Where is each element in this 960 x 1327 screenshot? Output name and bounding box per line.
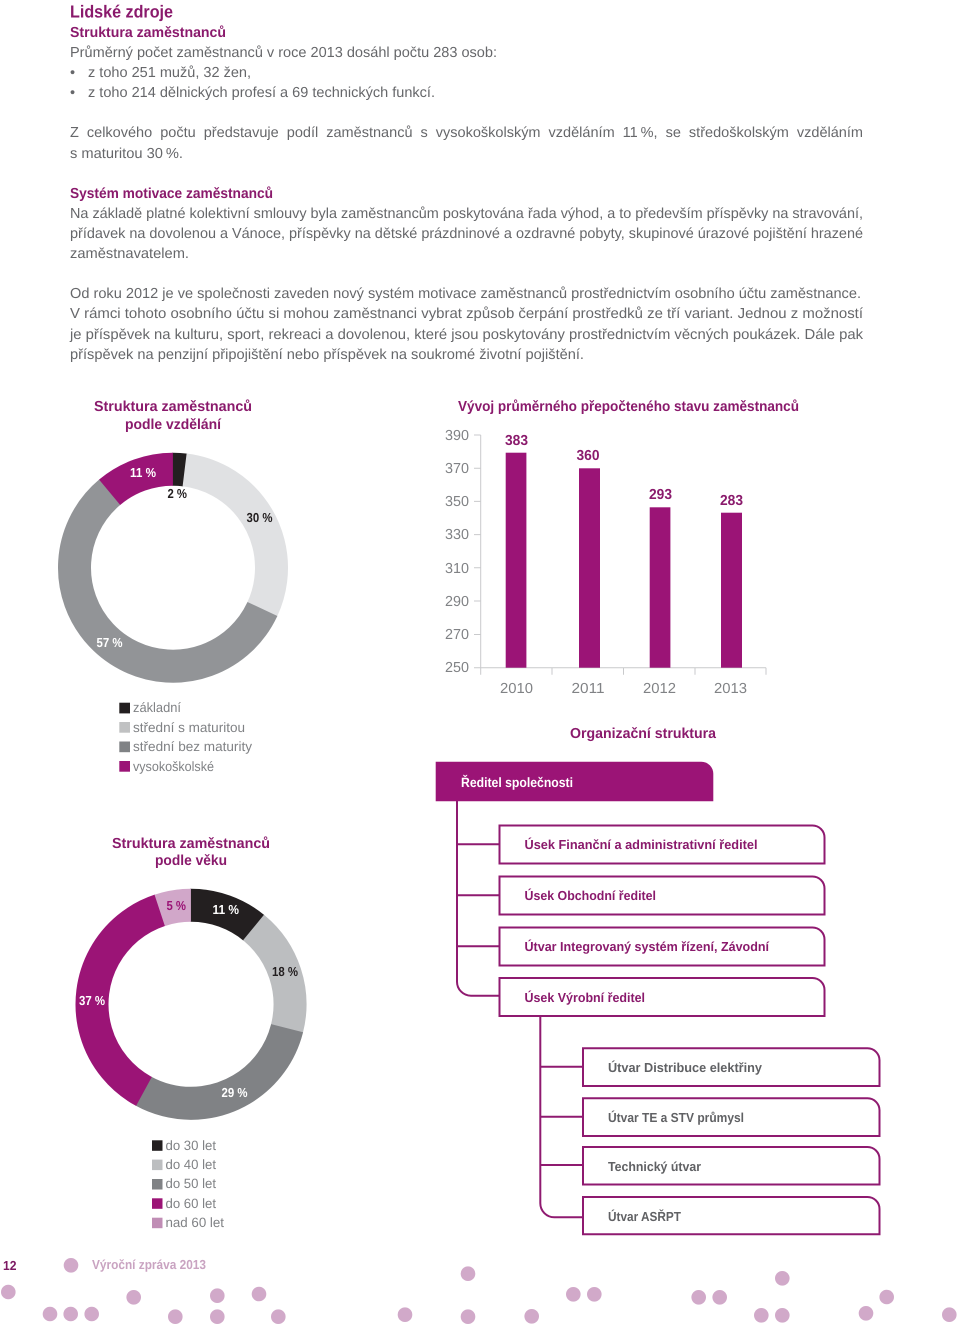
box: integrated management [500, 928, 824, 966]
legend: education: střední bez maturity [133, 739, 252, 754]
text block: motivation system: zaměstnavatelem. [70, 246, 189, 262]
donut chart: age: 11 % [212, 902, 239, 917]
heading: headcount chart: Vývoj průměrného přepočteného stavu zaměstnanců [458, 399, 799, 415]
bar chart: headcount: 2013 [714, 681, 747, 697]
box: TE and STV: Útvar TE a STV průmysl [608, 1110, 744, 1125]
heading: organisational structure: Organizační struktura [570, 726, 717, 742]
bar chart: headcount: 360 [576, 448, 600, 464]
box: sales director: Úsek Obchodní ředitel [524, 888, 656, 903]
donut chart: education: 2 % [168, 486, 187, 501]
legend: age [152, 1138, 224, 1230]
box: technical department: Technický útvar [608, 1159, 701, 1174]
legend: education: vysokoškolské [133, 759, 214, 774]
heading: age chart: Struktura zaměstnanců [112, 836, 270, 852]
donut chart: education [34, 429, 312, 706]
heading: age chart [112, 836, 270, 869]
text block: employee structure: • [70, 85, 75, 101]
box: finance director: Úsek Finanční a administrativní ředitel [524, 837, 758, 852]
bar chart: headcount: 290 [445, 594, 469, 610]
box: production director: Úsek Výrobní ředitel [524, 990, 645, 1005]
bar chart: headcount: 370 [445, 461, 469, 477]
text block: employee structure: s maturitou 30 %. [70, 146, 183, 162]
donut chart: education: 11 % [130, 465, 156, 480]
bar chart: headcount: 293 [649, 487, 672, 503]
report name: Výroční zpráva 2013 [92, 1257, 206, 1272]
box: TE and STV [583, 1098, 880, 1136]
panel: organisational structure [436, 726, 880, 1234]
box: ASRPT: Útvar ASŘPT [608, 1209, 681, 1224]
box: production director [500, 978, 824, 1016]
text block: employee structure: z toho 214 dělnických profesí a 69 technických funkcí. [88, 85, 435, 101]
text block: motivation system: Na základě platné kolektivní smlouvy byla zaměstnancům poskytována řada výhod, a to především příspěvky na stravování, [70, 206, 863, 222]
legend: education: střední s maturitou [133, 720, 245, 735]
dot pattern [1, 1258, 957, 1324]
box: finance director [500, 826, 824, 864]
text block: employee structure: Z celkového počtu představuje podíl zaměstnanců s vysokoškolským vzděláním 11 %, se středoškolským vzděláním [70, 125, 863, 141]
donut chart: age: 18 % [272, 964, 298, 979]
text block: employee structure [70, 25, 863, 162]
box: sales director [500, 876, 824, 914]
text block: motivation system: přídavek na dovolenou a Vánoce, příspěvky na dětské prázdninové a ozdravné pobyty, skupinové úrazové pojištění hrazené [70, 226, 863, 242]
bar chart: headcount [445, 428, 766, 697]
bar chart: headcount: 250 [445, 660, 469, 676]
bar chart: headcount: 330 [445, 527, 469, 543]
panel: education structure [34, 399, 312, 774]
bar chart: headcount: 283 [720, 493, 743, 509]
legend: education: základní [133, 700, 181, 715]
text block: motivation system: V rámci tohoto osobního účtu si mohou zaměstnanci vybrat způsob čerpání prostředků ze tří variant. Jednou z možností [70, 306, 863, 322]
connector lines: first level [457, 801, 500, 996]
box: electricity distribution: Útvar Distribuce elektřiny [608, 1060, 763, 1075]
bar chart: headcount: 350 [445, 494, 469, 510]
bar chart: headcount: 383 [505, 433, 528, 449]
heading: education chart [94, 399, 252, 433]
text block: motivation system: Od roku 2012 je ve společnosti zaveden nový systém motivace zaměstnanců prostřednictvím osobního účtu zaměstnance. [70, 286, 861, 302]
text block: employee structure: • [70, 65, 75, 81]
text block: employee structure: Průměrný počet zaměstnanců v roce 2013 dosáhl počtu 283 osob: [70, 45, 497, 61]
box: company director [436, 762, 713, 801]
heading: education chart: Struktura zaměstnanců [94, 399, 252, 415]
legend: age: do 40 let [166, 1157, 216, 1172]
text block: employee structure: z toho 251 mužů, 32 žen, [88, 65, 251, 81]
panel: age structure [52, 836, 330, 1230]
bar chart: headcount: 270 [445, 627, 469, 643]
box: company director: Ředitel společnosti [461, 774, 573, 790]
heading: employee structure: Struktura zaměstnanců [70, 25, 226, 41]
bar chart: headcount: 2011 [572, 681, 604, 697]
donut chart: age: 37 % [79, 993, 105, 1008]
connector lines: second level [540, 1016, 583, 1217]
donut chart: education: 57 % [96, 635, 123, 650]
heading: motivation system: Systém motivace zaměstnanců [70, 186, 273, 202]
text block: motivation system: příspěvek na penzijní připojištění nebo příspěvek na soukromé životní pojištění. [70, 347, 584, 363]
panel: headcount trend [445, 399, 799, 697]
heading: age chart: podle věku [155, 853, 227, 869]
legend: education [119, 700, 252, 774]
legend: age: do 60 let [166, 1196, 216, 1211]
legend: age: nad 60 let [166, 1215, 224, 1230]
box: integrated management: Útvar Integrovaný systém řízení, Závodní [524, 939, 769, 954]
donut chart: age: 29 % [222, 1085, 248, 1100]
box: ASRPT [583, 1197, 880, 1234]
bar chart: headcount: 390 [445, 428, 469, 444]
legend: age: do 50 let [166, 1176, 216, 1191]
footer [1, 1257, 957, 1324]
donut chart: education: 30 % [246, 510, 273, 525]
donut chart: age: 5 % [166, 898, 186, 913]
title: Lidské zdroje [70, 2, 173, 22]
heading: education chart: podle vzdělání [125, 417, 222, 433]
text block: motivation system: je příspěvek na kulturu, sport, rekreaci a dovolenou, které jsou poskytovány prostřednictvím věcných poukázek. Dále pak [69, 327, 864, 343]
box: electricity distribution [583, 1048, 880, 1086]
box: technical department [583, 1147, 880, 1184]
bar chart: headcount: 310 [445, 561, 469, 577]
bar chart: headcount: 2010 [500, 681, 533, 697]
text block: motivation system [69, 186, 864, 363]
donut chart: age [52, 865, 330, 1144]
legend: age: do 30 let [166, 1138, 216, 1153]
bar chart: headcount: 2012 [643, 681, 676, 697]
page number: 12 [3, 1258, 16, 1273]
